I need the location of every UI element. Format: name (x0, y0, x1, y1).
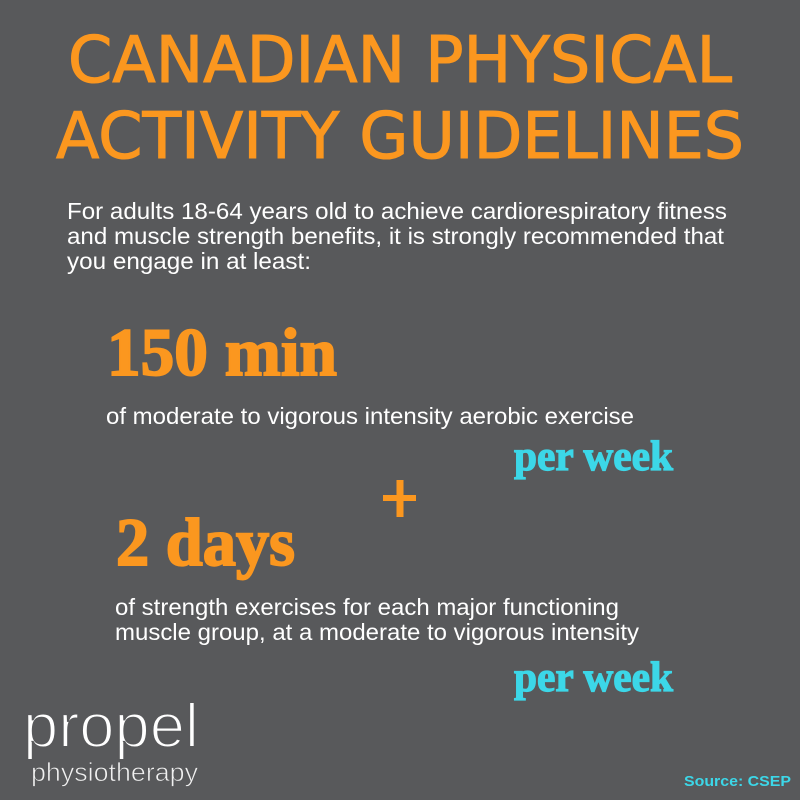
stat: 150 min: 150 min (107, 314, 337, 390)
intro text: and muscle strength benefits, it is strongly recommended that (67, 223, 724, 249)
strength description: muscle group, at a moderate to vigorous intensity (115, 619, 639, 645)
title: ACTIVITY GUIDELINES (56, 100, 744, 174)
intro text: you engage in at least: (67, 248, 311, 274)
intro text: For adults 18-64 years old to achieve cardiorespiratory fitness (67, 198, 727, 224)
logo: propel physiotherapy: physiotherapy (31, 757, 198, 787)
intro text (67, 198, 727, 274)
strength description (115, 594, 639, 645)
per week label 1: per week (514, 434, 674, 480)
plus sign (383, 480, 416, 517)
title: CANADIAN PHYSICAL (68, 24, 732, 98)
aerobic description: of moderate to vigorous intensity aerobic exercise (106, 403, 634, 429)
source credit: Source: CSEP (684, 773, 791, 790)
stat: 2 days: 2 days (116, 504, 295, 580)
title (56, 24, 744, 174)
strength description: of strength exercises for each major functioning (115, 594, 619, 620)
per week label 2: per week (514, 655, 674, 701)
logo: propel physiotherapy: propel (23, 692, 199, 761)
